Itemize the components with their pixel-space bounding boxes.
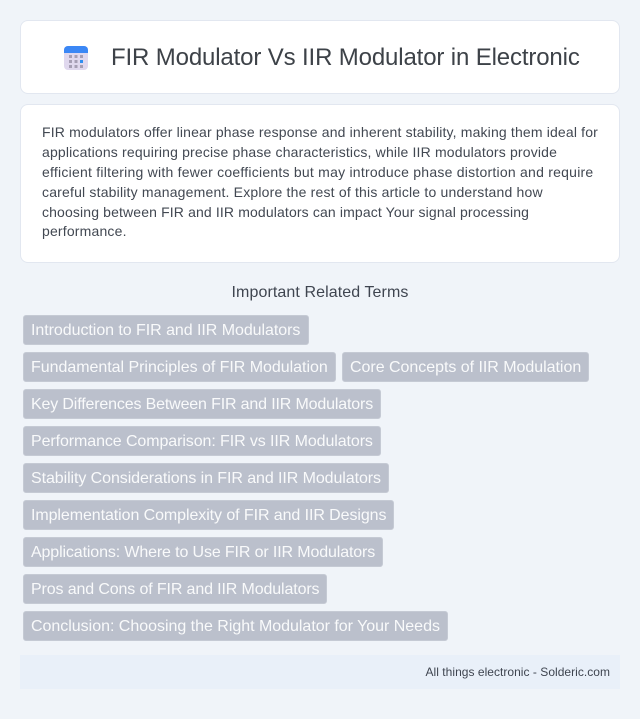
footer credit: All things electronic - Solderic.com <box>426 665 610 679</box>
tag <box>23 463 389 493</box>
tag <box>23 611 448 641</box>
icon: calendar <box>64 46 88 70</box>
tag: Pros and Cons of FIR and IIR Modulators <box>31 581 319 598</box>
summary text: careful stability management. Explore the rest of this article to understand how <box>42 184 543 200</box>
panel: summary <box>20 104 620 263</box>
footer bar <box>20 655 620 689</box>
tag: Performance Comparison: FIR vs IIR Modulators <box>31 433 373 450</box>
tag: Conclusion: Choosing the Right Modulator for Your Needs <box>31 618 440 635</box>
summary text: FIR modulators offer linear phase response and inherent stability, making them ideal for <box>42 124 598 140</box>
tag: Core Concepts of IIR Modulation <box>350 359 581 376</box>
tag <box>342 352 589 382</box>
tag <box>23 389 381 419</box>
summary text: applications requiring precise phase characteristics, while IIR modulators provide <box>42 144 557 160</box>
tag: Implementation Complexity of FIR and IIR Designs <box>31 507 386 524</box>
tag <box>23 500 394 530</box>
tag: Introduction to FIR and IIR Modulators <box>31 322 300 339</box>
tag <box>23 315 309 345</box>
panel: title header <box>20 20 620 94</box>
tag: Stability Considerations in FIR and IIR Modulators <box>31 470 381 487</box>
tag: Key Differences Between FIR and IIR Modulators <box>31 396 373 413</box>
summary text <box>42 124 598 239</box>
summary text: choosing between FIR and IIR modulators can impact Your signal processing <box>42 204 529 220</box>
tag: Fundamental Principles of FIR Modulation <box>31 359 328 376</box>
tag <box>23 426 381 456</box>
tag: Applications: Where to Use FIR or IIR Modulators <box>31 544 375 561</box>
summary text: performance. <box>42 223 127 239</box>
tag <box>23 352 336 382</box>
title: FIR Modulator Vs IIR Modulator in Electronic <box>111 44 580 71</box>
heading: important related terms: Important Related Terms <box>232 284 408 301</box>
tag <box>23 574 327 604</box>
summary text: efficient filtering with fewer coefficients but may introduce phase distortion and require <box>42 164 593 180</box>
panel: related terms tags <box>23 315 589 641</box>
tag <box>23 537 383 567</box>
